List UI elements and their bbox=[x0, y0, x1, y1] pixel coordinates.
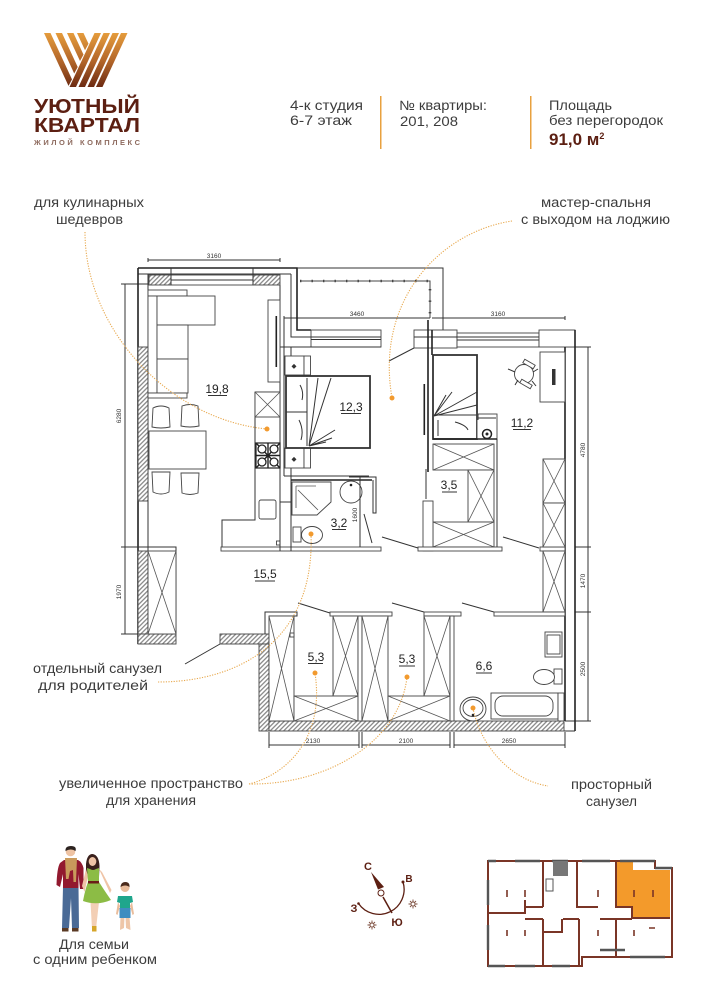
wardrobe room bbox=[382, 439, 539, 551]
dimension lines: 1600 bbox=[352, 507, 359, 522]
room areas: 11,2 bbox=[511, 416, 534, 430]
dimension lines: 2500 bbox=[580, 661, 587, 676]
dimension lines: 2130 bbox=[306, 738, 321, 745]
logo wordmark: УЮТНЫЙ bbox=[34, 94, 140, 118]
header: apartment numbers bbox=[380, 96, 487, 149]
icon: compass bbox=[351, 861, 418, 930]
callout: main bathroom: санузел bbox=[586, 794, 637, 809]
callout: parents bathroom: для родителей bbox=[38, 678, 148, 693]
logo wordmark: КВАРТАЛ bbox=[34, 115, 140, 137]
callout: storage: увеличенное пространство bbox=[59, 776, 243, 791]
bedroom closet bbox=[540, 459, 565, 612]
header: area: 91,0 м bbox=[549, 130, 599, 149]
room areas: 19,8 bbox=[205, 382, 229, 396]
header: area: Площадь bbox=[549, 98, 612, 113]
dimension lines: 4780 bbox=[580, 442, 587, 457]
callout: master bedroom: с выходом на лоджию bbox=[521, 212, 670, 227]
callout: kitchen: шедевров bbox=[56, 212, 123, 227]
callout: kitchen: для кулинарных bbox=[34, 195, 144, 210]
logo wordmark: ЖИЛОЙ КОМПЛЕКС bbox=[33, 138, 141, 147]
storage closets bbox=[265, 603, 565, 721]
icon: compass: Ю bbox=[391, 917, 403, 929]
icon: compass: С bbox=[364, 861, 372, 873]
callout: main bathroom: просторный bbox=[571, 777, 652, 792]
logo mark bbox=[44, 33, 128, 87]
living room closet bbox=[125, 547, 176, 634]
child bbox=[116, 882, 134, 930]
icon: family bbox=[56, 846, 134, 932]
room areas: 6,6 bbox=[476, 659, 493, 673]
room areas: 5,3 bbox=[399, 652, 416, 666]
family caption bbox=[33, 937, 157, 967]
dimension lines: 3160 bbox=[491, 311, 506, 318]
key plan walls bbox=[488, 861, 672, 966]
family caption: с одним ребенком bbox=[33, 952, 157, 967]
callout: storage: для хранения bbox=[106, 793, 196, 808]
dining table and chairs bbox=[149, 404, 206, 494]
woman bbox=[82, 854, 112, 932]
highlighted apartment bbox=[617, 862, 670, 918]
header: apartment type: 4-к студия bbox=[290, 98, 363, 113]
dimension lines: 6280 bbox=[116, 408, 123, 423]
dimension lines: 2100 bbox=[399, 738, 414, 745]
second bedroom bbox=[424, 355, 497, 439]
room areas: 15,5 bbox=[253, 567, 277, 581]
callout: parents bathroom: отдельный санузел bbox=[33, 661, 162, 676]
master bedroom bed: ◆ bbox=[292, 456, 296, 463]
master bedroom bed bbox=[284, 318, 370, 476]
tv unit bbox=[268, 300, 280, 382]
callout: storage bbox=[59, 670, 410, 808]
header: apartment type: 6-7 этаж bbox=[290, 113, 352, 128]
header: apartment numbers: № квартиры: bbox=[399, 98, 487, 113]
icon: sun south bbox=[368, 920, 376, 930]
main bathroom fixtures bbox=[460, 632, 564, 721]
dimension lines: 1470 bbox=[580, 573, 587, 588]
room areas: 5,3 bbox=[308, 650, 325, 664]
floor plan bbox=[116, 253, 591, 748]
callout: parents bathroom bbox=[33, 532, 314, 693]
desk and chair bbox=[508, 352, 565, 402]
dimension lines: 3460 bbox=[350, 311, 365, 318]
header: apartment type bbox=[290, 98, 363, 128]
room areas bbox=[205, 382, 534, 673]
room areas: 12,3 bbox=[339, 400, 363, 414]
room areas: 3,5 bbox=[441, 478, 458, 492]
callout: master bedroom bbox=[389, 195, 670, 400]
key plan windows bbox=[488, 861, 672, 966]
dimension lines: 1970 bbox=[116, 584, 123, 599]
family caption: Для семьи bbox=[59, 937, 129, 952]
bathroom one bbox=[291, 477, 376, 547]
man bbox=[56, 846, 84, 932]
header: area bbox=[530, 96, 663, 149]
icon: compass: З bbox=[351, 903, 358, 915]
callout: kitchen bbox=[34, 195, 270, 432]
key plan of floor bbox=[488, 861, 672, 966]
header: area: 2 bbox=[599, 131, 604, 141]
icon: compass: В bbox=[405, 874, 413, 885]
header: apartment numbers: 201, 208 bbox=[400, 114, 458, 129]
master bedroom bed: ◆ bbox=[292, 363, 296, 370]
dimension lines bbox=[116, 253, 591, 748]
walls bbox=[138, 268, 575, 731]
dimension lines: 3160 bbox=[207, 253, 222, 260]
room areas: 3,2 bbox=[331, 516, 348, 530]
dimension lines: 2650 bbox=[502, 738, 517, 745]
callout: master bedroom: мастер-спальня bbox=[541, 195, 651, 210]
kitchen bbox=[221, 392, 381, 551]
logo wordmark bbox=[33, 94, 141, 147]
callout: main bathroom bbox=[470, 706, 652, 809]
sofa bbox=[148, 290, 215, 398]
icon: sun east bbox=[408, 900, 418, 908]
header: area: без перегородок bbox=[549, 113, 663, 128]
